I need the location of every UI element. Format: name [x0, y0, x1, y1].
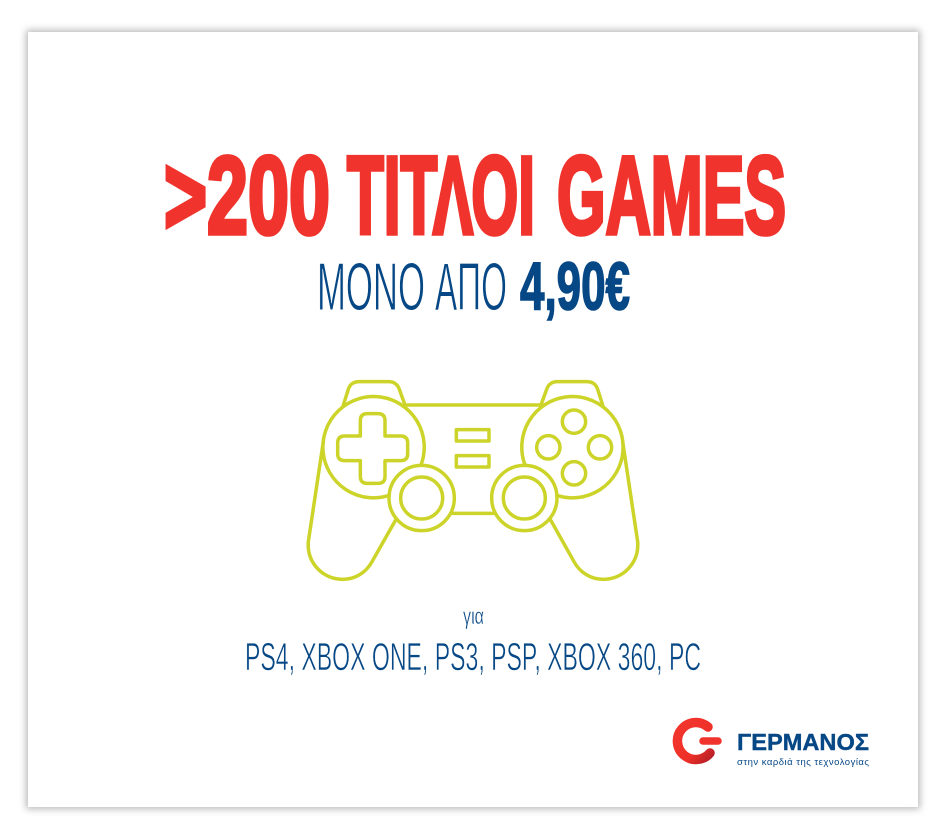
centre buttons	[456, 430, 489, 467]
title	[164, 135, 786, 258]
icon: game controller	[308, 382, 638, 579]
subtitle: price: ΑΠΟ	[435, 249, 507, 325]
body top and bottom edges	[405, 405, 541, 513]
right bumper	[541, 382, 603, 405]
subtitle: price: 4,90€	[520, 248, 630, 324]
right grip	[551, 442, 638, 579]
right circle	[522, 397, 623, 498]
right stick	[492, 465, 557, 531]
title: >200	[164, 135, 330, 258]
left bumper	[343, 382, 405, 405]
title: ΤΙΤΛΟΙ	[347, 135, 535, 258]
left circle	[323, 397, 424, 498]
subtitle: price	[317, 248, 630, 325]
subtitle: price: ΜΟΝΟ	[317, 249, 425, 325]
logo tagline: στην καρδιά της τεχνολογίας	[737, 757, 869, 768]
left grip	[308, 442, 396, 579]
label: για: για	[463, 603, 484, 629]
action buttons	[537, 410, 612, 485]
left stick	[389, 465, 454, 531]
logo: Germanos	[677, 723, 869, 768]
d-pad	[338, 414, 408, 483]
logo name: ΓΕΡΜΑΝΟΣ	[737, 729, 869, 755]
logo mark	[677, 723, 718, 760]
